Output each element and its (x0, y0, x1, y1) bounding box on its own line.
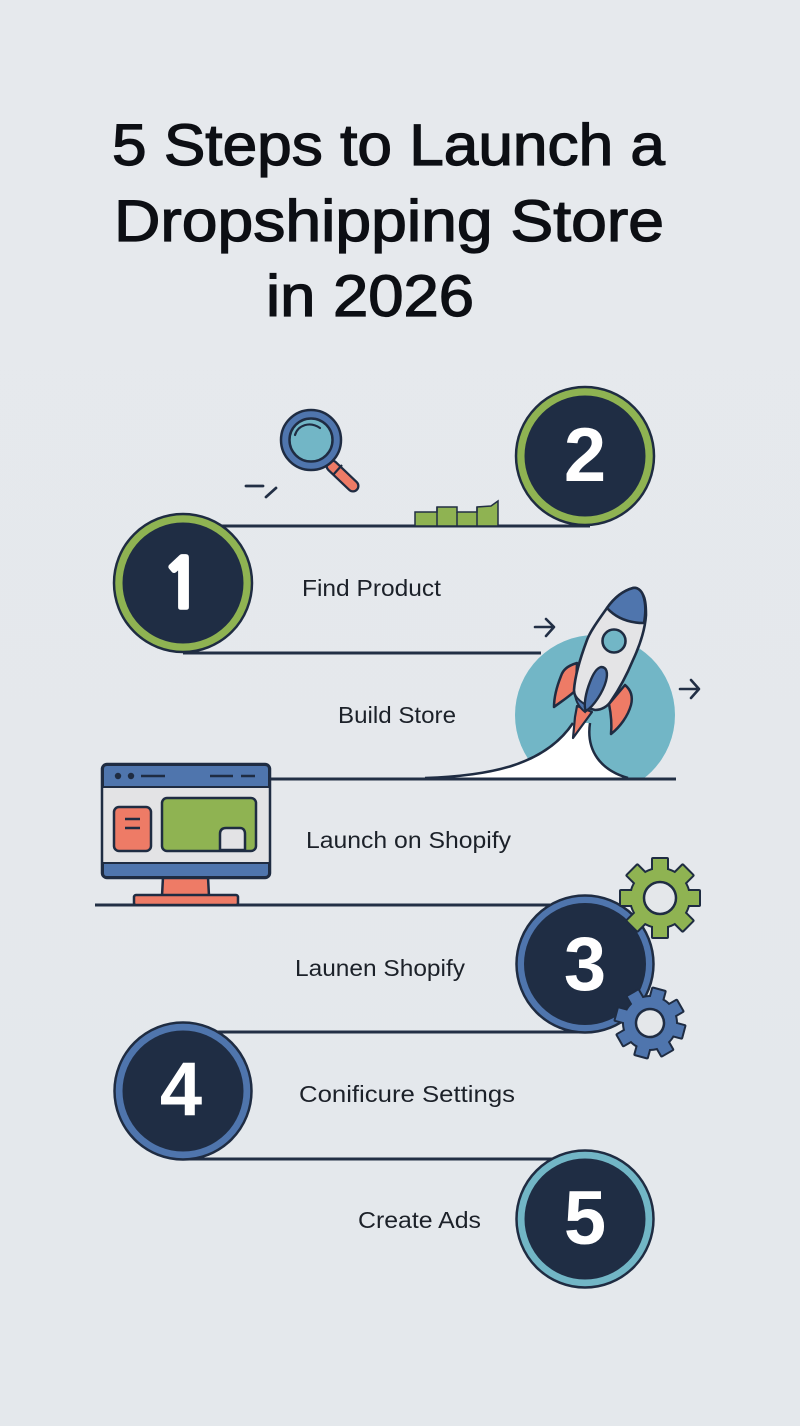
icon: arrow right (680, 680, 699, 698)
step 1 badge (114, 514, 252, 652)
step 2 badge: 2 (564, 413, 606, 498)
title: in 2026 (266, 264, 474, 329)
label: launch on shopify: Launch on Shopify (306, 827, 512, 853)
step 3 badge (516, 896, 654, 1032)
icon: blue gear (606, 979, 694, 1067)
step 5 badge (516, 1150, 654, 1288)
title: Dropshipping Store (114, 189, 664, 254)
title: 5 Steps to Launch a (112, 113, 666, 178)
line under rocket (268, 778, 676, 780)
step 3 badge: 3 (564, 922, 606, 1007)
step 5 badge: 5 (564, 1176, 606, 1261)
label: build store: Build Store (338, 702, 456, 728)
icon: magnifying glass (281, 410, 353, 486)
label: find product: Find Product (302, 575, 442, 601)
connector lines (95, 526, 590, 1159)
step 2 badge (516, 387, 654, 525)
label: launen shopify: Launen Shopify (295, 955, 466, 981)
step 1 badge: 1 (161, 552, 203, 619)
icon: rocket launch (425, 588, 675, 795)
step 4 badge (114, 1022, 252, 1160)
icon: sparkle dashes (246, 486, 276, 497)
step 4 badge: 4 (160, 1047, 202, 1132)
title (112, 113, 666, 329)
icon: bar chart (415, 501, 498, 526)
label: configure settings: Coniﬁcure Settings (299, 1081, 515, 1107)
icon: monitor (102, 764, 270, 905)
label: create ads: Create Ads (358, 1207, 481, 1233)
icon: arrow upper (535, 619, 554, 636)
icon: green gear (619, 857, 701, 939)
